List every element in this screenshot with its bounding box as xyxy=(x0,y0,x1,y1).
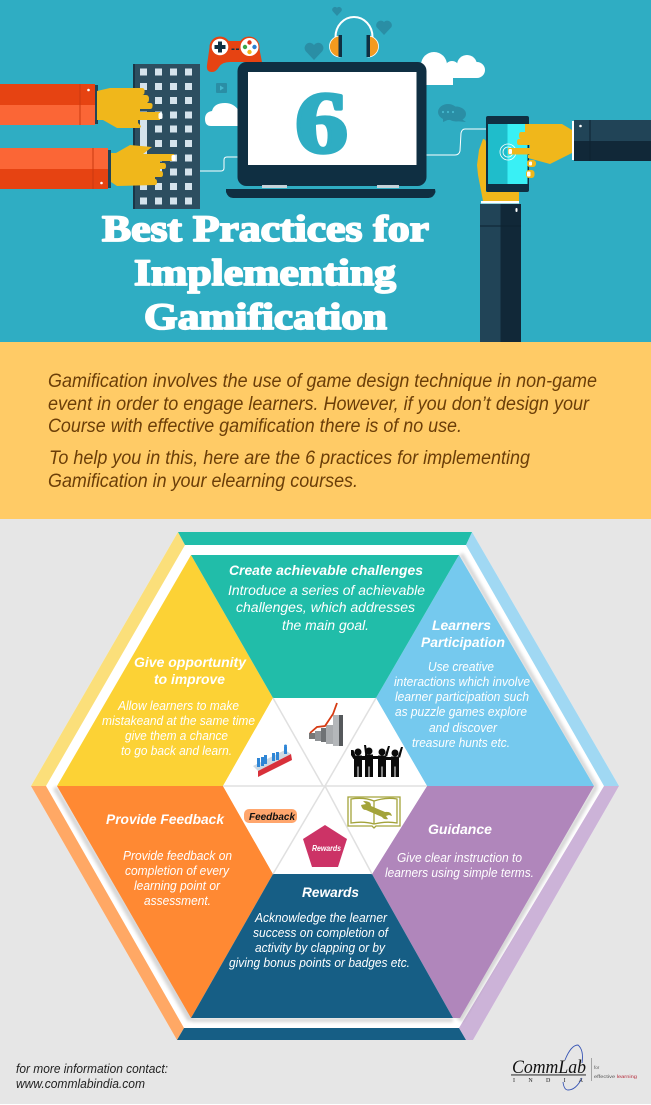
icon: chat bubbles xyxy=(438,104,466,122)
footer contact: www.commlabindia.com xyxy=(16,1076,145,1091)
feedback badge xyxy=(244,809,297,823)
icon: keyboard xyxy=(133,64,200,209)
icon: headphones xyxy=(330,17,378,57)
intro panel: To help you in this, here are the 6 practices for implementing xyxy=(49,448,530,469)
centre hexagon xyxy=(223,698,427,874)
numeral 6: 6 xyxy=(295,75,348,172)
segment: guidance: Guidance xyxy=(428,821,492,837)
segment: create achievable challenges: Introduce a series of achievable xyxy=(228,583,425,598)
segment: create achievable challenges: the main goal. xyxy=(282,618,369,633)
segment: learners participation: Learners xyxy=(432,617,491,633)
logo: CommLab India: for xyxy=(594,1065,600,1070)
icon: cloud right xyxy=(418,52,485,85)
rewards pentagon: Rewards xyxy=(312,844,341,853)
arm: right pointing xyxy=(508,120,651,178)
arm: bottom right holding phone xyxy=(477,139,521,342)
segment: give opportunity: mistakeand at the same time xyxy=(102,714,255,728)
segment: guidance: learners using simple terms. xyxy=(385,866,534,880)
segment: provide feedback: Provide feedback on xyxy=(123,849,232,863)
intro panel xyxy=(0,342,651,519)
header banner xyxy=(0,0,651,342)
icon: cloud left xyxy=(205,103,239,126)
logo: CommLab India: effective learning xyxy=(594,1074,637,1080)
hexagon white base xyxy=(31,532,619,1040)
outer band: lower right xyxy=(459,786,619,1040)
title: Implementing xyxy=(134,253,397,294)
footer contact xyxy=(16,1061,168,1091)
icon: video play xyxy=(216,83,227,93)
segment: provide feedback: Provide Feedback xyxy=(106,811,225,827)
outer band: bottom xyxy=(177,1028,466,1040)
segment: provide feedback: assessment. xyxy=(144,894,211,908)
feedback badge: Feedback xyxy=(249,812,295,823)
icon: blue figures on red steps xyxy=(253,744,292,777)
shadows xyxy=(53,553,598,1022)
icon: rising bar chart xyxy=(309,703,343,746)
segment: learners participation: and discover xyxy=(429,721,498,735)
outer band: lower left xyxy=(31,786,184,1040)
segment: learners participation: as puzzle games explore xyxy=(395,705,527,719)
segment: give opportunity: to improve xyxy=(154,671,225,687)
segment: guidance: Give clear instruction to xyxy=(397,851,522,865)
title: Best Practices for xyxy=(102,209,429,250)
outer band: top xyxy=(178,532,472,545)
intro panel: Gamification in your elearning courses. xyxy=(48,471,358,492)
arm: lower left xyxy=(0,145,176,189)
segment: learners participation: interactions which involve xyxy=(394,675,530,689)
title: Gamification xyxy=(144,297,387,338)
segment: learners participation: Participation xyxy=(421,634,505,650)
segment: rewards: giving bonus points or badges etc. xyxy=(229,956,410,970)
segment: create achievable challenges: Create achievable challenges xyxy=(229,562,423,578)
segment: give opportunity: give them a chance xyxy=(125,729,228,743)
icon: game controller xyxy=(207,36,262,72)
segment: create achievable challenges xyxy=(191,555,459,698)
icon: hearts xyxy=(305,7,392,60)
segment: rewards: Acknowledge the learner xyxy=(254,911,388,925)
segment: give opportunity: Give opportunity xyxy=(134,654,247,670)
outer band: upper left xyxy=(31,532,185,786)
segment: learners participation: treasure hunts etc. xyxy=(412,736,510,750)
footer contact: for more information contact: xyxy=(16,1061,168,1076)
title xyxy=(102,209,429,338)
logo: CommLab India xyxy=(511,1045,637,1090)
segment: rewards: activity by clapping or by xyxy=(255,941,386,955)
segment: rewards: Rewards xyxy=(302,884,359,900)
logo: CommLab India: CommLab xyxy=(512,1057,586,1078)
icon: smartphone xyxy=(486,116,529,192)
segment: create achievable challenges: challenges, which addresses xyxy=(236,600,415,615)
rewards pentagon xyxy=(303,825,347,867)
segment: guidance xyxy=(372,786,594,1018)
intro panel: Gamification involves the use of game design technique in non-game xyxy=(48,371,597,392)
outer band: upper right xyxy=(466,532,619,786)
cable: right xyxy=(426,129,487,155)
grey background section xyxy=(0,519,651,1104)
segment: rewards xyxy=(191,874,453,1018)
icon: cheering team xyxy=(351,745,403,777)
icon: laptop xyxy=(226,62,436,198)
segment: learners participation xyxy=(376,555,594,786)
segment: give opportunity: Allow learners to make xyxy=(117,699,239,713)
arm: upper left xyxy=(0,84,162,128)
hexagon diagram xyxy=(31,532,619,1040)
logo: CommLab India: I N D I A xyxy=(513,1078,584,1084)
cable: left xyxy=(200,157,238,171)
segment: provide feedback xyxy=(57,786,273,1018)
segment: give opportunity xyxy=(57,555,273,786)
intro panel: Course with effective gamification there is of no use. xyxy=(48,416,462,437)
segment: rewards: success on completion of xyxy=(253,926,389,940)
segment: provide feedback: learning point or xyxy=(134,879,221,893)
intro panel: event in order to engage learners. However, if you don’t design your xyxy=(48,394,590,415)
segment: learners participation: learner participation such xyxy=(395,690,529,704)
segment: give opportunity: to go back and learn. xyxy=(121,744,232,758)
icon: guide book with wrench xyxy=(348,797,400,828)
segment: provide feedback: completion of every xyxy=(125,864,230,878)
segment: learners participation: Use creative xyxy=(428,660,494,674)
